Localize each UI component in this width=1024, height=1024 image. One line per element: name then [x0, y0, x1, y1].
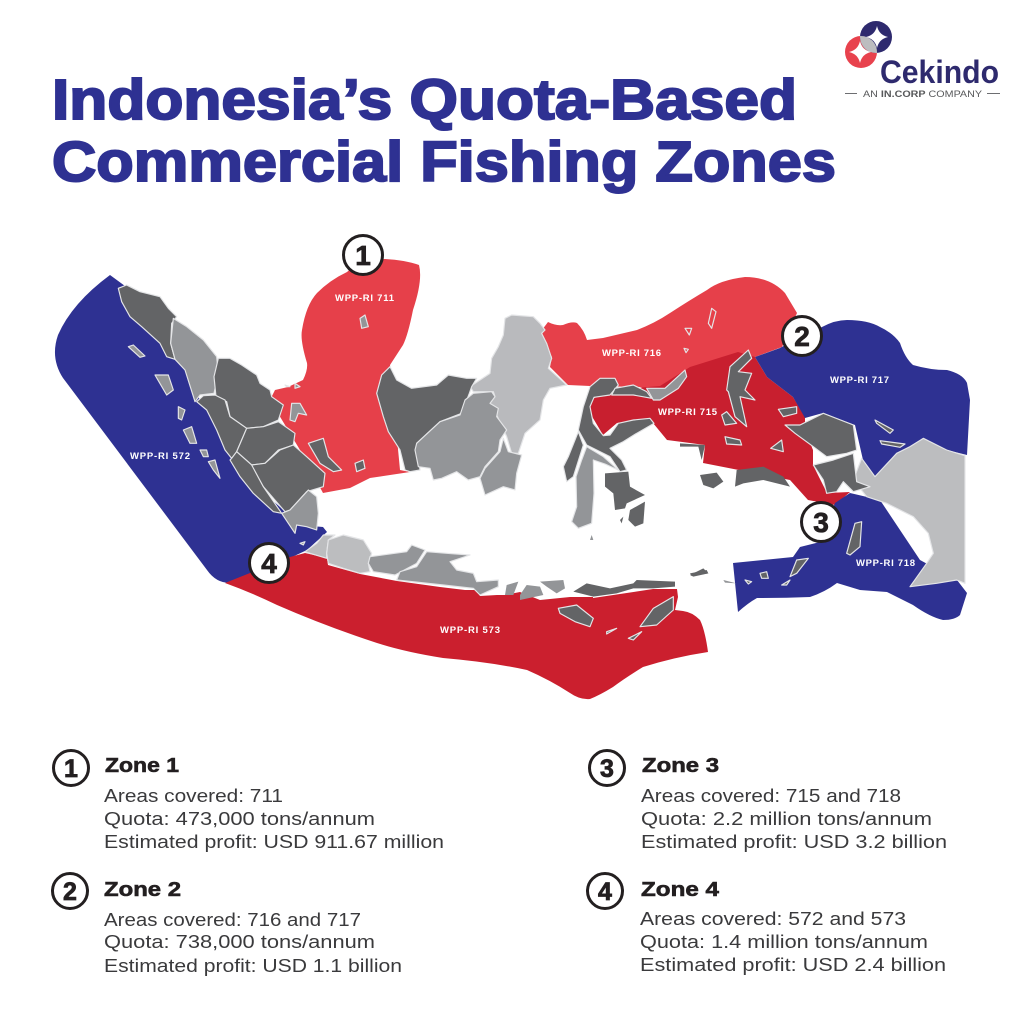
- logo: Cekindo: [845, 21, 1000, 100]
- zone: WPP-RI 715: [590, 352, 850, 505]
- legend: Zone 3: 3: [600, 755, 614, 783]
- legend: Zone 4: 4: [598, 878, 612, 906]
- zone: WPP-RI 716: [542, 277, 797, 400]
- logo: Cekindo: AN IN.CORP COMPANY: [863, 89, 983, 100]
- Kalimantan and Sulawesi provinces: [377, 315, 687, 540]
- legend: Zone 2: Estimated profit: USD 1.1 billion: [104, 955, 402, 976]
- title: Commercial Fishing Zones: [52, 130, 836, 194]
- zone labels: WPP-RI 715: [658, 407, 718, 418]
- legend: Zone 2: Areas covered: 716 and 717: [104, 909, 361, 930]
- zone: WPP-RI 718: [733, 493, 967, 620]
- legend: Zone 3: Areas covered: 715 and 718: [641, 785, 901, 806]
- legend: Zone 2: [52, 874, 402, 976]
- legend: Zone 1: [54, 750, 444, 852]
- map marker 3: 3: [813, 507, 829, 538]
- zone: WPP-RI 572: [55, 275, 327, 583]
- zone: WPP-RI 717: [755, 320, 970, 477]
- zone labels: WPP-RI 572: [130, 451, 190, 462]
- legend: Zone 4: Areas covered: 572 and 573: [640, 908, 906, 929]
- zone: WPP-RI 711: [270, 259, 420, 493]
- zone labels: WPP-RI 717: [830, 375, 889, 386]
- map marker 4: 4: [261, 548, 277, 579]
- zone labels: WPP-RI 718: [856, 558, 915, 569]
- zone labels: WPP-RI 716: [602, 348, 661, 359]
- Sumatra provinces: [118, 285, 368, 545]
- zone: WPP-RI 573: [225, 553, 708, 699]
- legend: Zone 1: Estimated profit: USD 911.67 million: [104, 831, 444, 852]
- Java and Nusa Tenggara: [305, 535, 708, 640]
- legend: Zone 4: [588, 874, 946, 975]
- legend: Zone 3: [590, 750, 947, 852]
- map marker 2: [782, 316, 822, 356]
- legend: Zone 3: Zone 3: [642, 755, 719, 777]
- map marker 1: [344, 236, 382, 274]
- title: [52, 68, 836, 194]
- zone labels: [130, 293, 915, 636]
- legend: Zone 1: Areas covered: 711: [104, 785, 283, 806]
- Papua and eastern islands: [680, 308, 965, 587]
- legend: Zone 3: Estimated profit: USD 3.2 billion: [641, 831, 947, 852]
- legend: Zone 3: Quota: 2.2 million tons/annum: [641, 808, 932, 829]
- legend: Zone 2: Quota: 738,000 tons/annum: [104, 931, 375, 952]
- zone labels: WPP-RI 573: [440, 625, 500, 636]
- legend: Zone 1: 1: [64, 755, 78, 783]
- legend: Zone 1: Quota: 473,000 tons/annum: [104, 808, 375, 829]
- legend: Zone 2: Zone 2: [104, 879, 181, 901]
- Sumatra offshore islands: [128, 315, 368, 545]
- legend: Zone 4: Estimated profit: USD 2.4 billion: [640, 954, 946, 975]
- legend: Zone 4: Quota: 1.4 million tons/annum: [640, 931, 928, 952]
- legend: Zone 4: Zone 4: [641, 879, 720, 901]
- map of Indonesia fishing zones: [55, 236, 970, 699]
- map marker 2: 2: [794, 321, 810, 352]
- map marker 4: [250, 544, 288, 582]
- map marker 1: 1: [355, 240, 371, 271]
- zone labels: WPP-RI 711: [335, 293, 395, 304]
- legend: Zone 1: Zone 1: [105, 755, 179, 777]
- title: Indonesia’s Quota-Based: [52, 68, 797, 132]
- logo: Cekindo: Cekindo: [880, 54, 999, 90]
- legend: Zone 2: 2: [63, 878, 77, 906]
- map marker 3: [802, 502, 840, 542]
